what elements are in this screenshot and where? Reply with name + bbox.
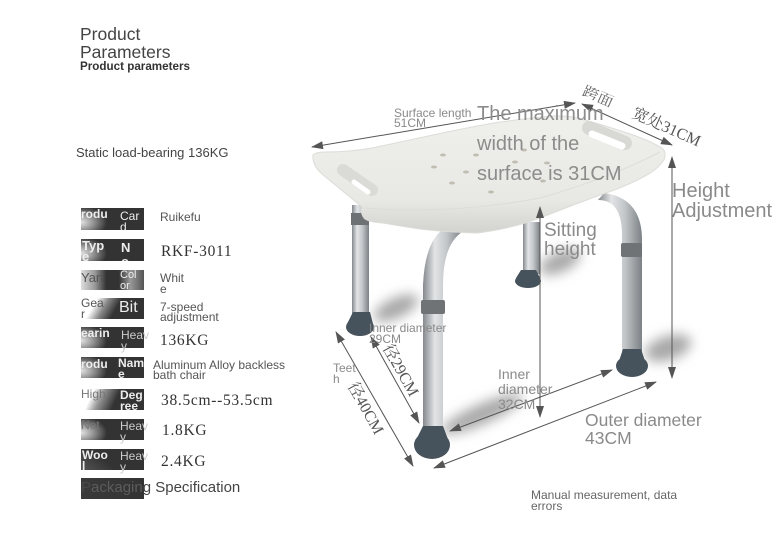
seat — [313, 116, 665, 233]
parameter label: product name — [81, 357, 144, 378]
right handle — [589, 128, 625, 143]
label: height adjustment: Height Adjustment — [672, 180, 772, 222]
label: teeth: Teet h — [333, 361, 356, 386]
parameter value: brand: Ruikefu — [160, 210, 201, 224]
parameter label: net weight: Net — [81, 418, 100, 432]
title — [80, 24, 190, 73]
label: outer diameter 43CM: Outer diameter 43CM — [585, 410, 702, 448]
static load text: Static load-bearing 136KG — [76, 145, 228, 160]
left handle hole — [354, 182, 368, 192]
label: rotated diameter 40CM: 径40CM — [344, 380, 386, 438]
label: rotated diameter 29CM: 径29CM — [379, 342, 421, 400]
parameter label: model — [81, 239, 144, 261]
parameter label: brand — [81, 208, 144, 230]
parameter value: height: 38.5cm--53.5cm — [161, 392, 273, 409]
parameter label: bearing — [81, 327, 144, 348]
title: Product Parameters — [80, 24, 170, 62]
parameter label: gross weight: Heav y — [120, 449, 148, 474]
parameter label: gross weight — [81, 449, 144, 470]
parameter value: product name: Aluminum Alloy backless bath chair — [153, 358, 285, 382]
front right leg — [598, 193, 648, 377]
front left leg — [414, 228, 462, 459]
parameter label: height — [81, 389, 144, 410]
parameter label: gear: Bit — [119, 299, 138, 316]
label: surface length: Surface length 51CM — [394, 106, 471, 130]
parameter value: colour: Whit e — [160, 271, 184, 296]
label: maximum width of the surface: The maximum width of the surface is 31CM — [477, 103, 622, 185]
parameter label: colour — [81, 270, 144, 290]
back left leg — [346, 205, 374, 336]
parameter label: packaging bar — [81, 478, 144, 499]
parameter value: bearing: 136KG — [160, 332, 209, 349]
note: manual measurement: Manual measurement, data errors — [531, 488, 677, 513]
parameter label: gross weight: Woo l — [82, 448, 108, 473]
parameter value: net weight: 1.8KG — [162, 422, 207, 439]
parameter value: packaging specification: Packaging Specification — [81, 479, 240, 496]
parameter label: net weight — [81, 419, 144, 440]
label: sitting height: Sitting height — [544, 220, 597, 260]
left handle — [343, 170, 372, 190]
parameter label: bearing: earin — [81, 326, 110, 340]
seat drain holes — [431, 148, 550, 194]
parameter label: product name: rodu — [81, 357, 108, 371]
title: Product parameters — [80, 59, 190, 73]
parameter label: colour: Yan — [81, 270, 103, 285]
parameter label: net weight: Heav y — [120, 419, 148, 444]
back right leg — [515, 222, 541, 288]
label: rotated width 31CM: 宽处31CM — [629, 105, 703, 150]
parameter label: bearing: Heav y — [121, 328, 149, 353]
dimension arrows — [312, 103, 672, 468]
parameter label: gear — [81, 298, 144, 319]
seat front rim — [365, 152, 660, 210]
label: inner diameter 29CM: Inner diameter 29CM — [369, 321, 446, 346]
parameter value: gross weight: 2.4KG — [161, 453, 206, 470]
parameter value: model: RKF-3011 — [161, 243, 232, 260]
floor shadows — [370, 244, 695, 441]
parameter value: gear: 7-speed adjustment — [160, 300, 219, 324]
label: inner diameter 32CM: Inner diameter 32CM — [498, 366, 552, 412]
right handle hole — [592, 134, 622, 146]
